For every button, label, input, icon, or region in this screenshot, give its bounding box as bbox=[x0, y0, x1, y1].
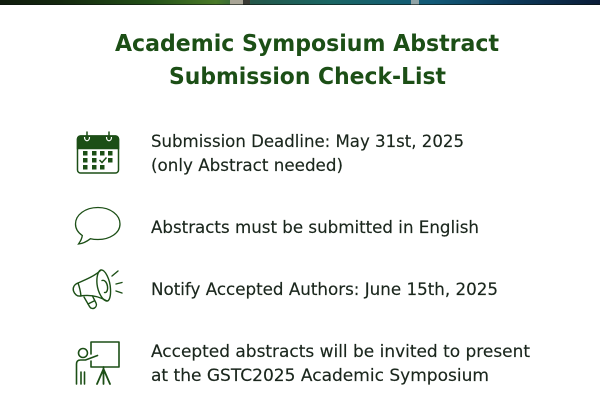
text: notify authors: Notify Accepted Authors: June 15th, 2025 bbox=[151, 280, 498, 299]
title: Academic Symposium Abstract bbox=[115, 29, 499, 57]
title bbox=[115, 29, 499, 90]
banner photo strip bbox=[0, 0, 600, 5]
icon: speech bubble bbox=[76, 208, 120, 244]
icon: megaphone bbox=[73, 270, 122, 308]
icon: presenter at board bbox=[76, 342, 119, 384]
text: submission deadline: Submission Deadline: May 31st, 2025 bbox=[151, 132, 464, 151]
text: submission deadline: (only Abstract needed) bbox=[151, 156, 343, 175]
icon: calendar bbox=[78, 132, 118, 173]
text: english requirement: Abstracts must be submitted in English bbox=[151, 218, 479, 237]
text: submission deadline bbox=[151, 132, 464, 175]
title: Submission Check-List bbox=[169, 62, 446, 90]
text: presentation invitation: at the GSTC2025 Academic Symposium bbox=[151, 366, 489, 385]
text: presentation invitation bbox=[151, 342, 531, 385]
text: presentation invitation: Accepted abstracts will be invited to present bbox=[151, 342, 531, 361]
